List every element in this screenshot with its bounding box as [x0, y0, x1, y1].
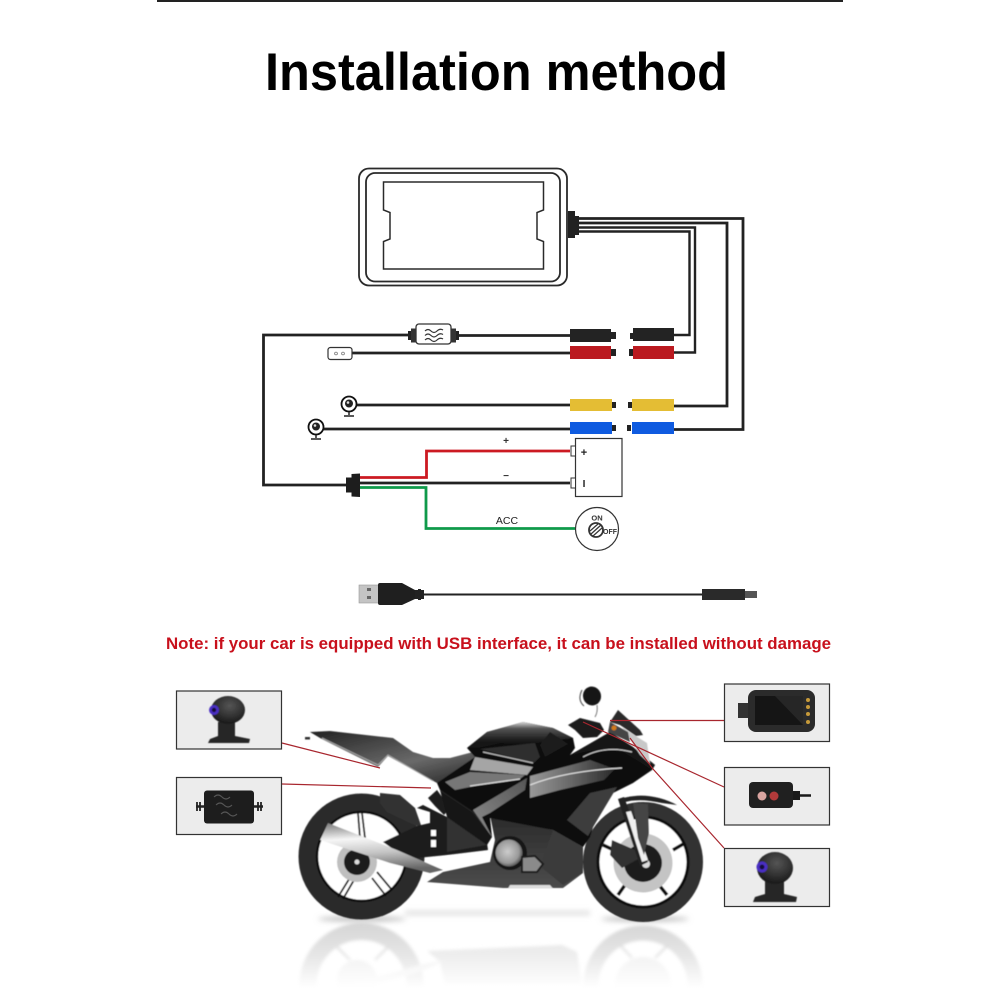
front camera icon and wire: [342, 396, 570, 416]
title: Installation method: [265, 43, 728, 102]
ACC green wire: ACC: [496, 515, 519, 527]
engine: [493, 836, 543, 872]
callout box: dash cam unit: [724, 684, 830, 742]
ignition switch: ON: [591, 514, 603, 522]
motorcycle: [305, 684, 696, 915]
ground shadow: [318, 911, 689, 921]
mirror: [580, 684, 604, 717]
exhaust pipe: [320, 823, 443, 873]
ACC green wire: [360, 488, 575, 528]
mid lower panel: [567, 787, 617, 836]
rear fender: [380, 793, 422, 828]
device outline: dash cam screen: [359, 168, 567, 286]
callout box: waterproof module: [176, 778, 282, 834]
ignition switch: OFF: [603, 529, 618, 536]
swingarm and frame: [383, 790, 492, 859]
blue connector pair: [570, 422, 674, 434]
power socket with wire: [328, 348, 570, 360]
rear camera icon and wire: [308, 420, 570, 439]
battery: [571, 438, 622, 496]
negative black wire: −: [503, 471, 509, 482]
windscreen: [608, 710, 650, 764]
wiring diagram: [264, 168, 743, 550]
note text: Note: if your car is equipped with USB interface, it can be installed without damage: [166, 635, 831, 653]
callout box: rear camera: [176, 691, 282, 749]
callout box: front camera: [724, 848, 830, 906]
front wheel: [590, 809, 696, 915]
battery: +: [581, 447, 587, 459]
power wire: left loop to fuse module: [264, 335, 570, 485]
wiring harness plug: [346, 474, 360, 497]
top rule: [157, 0, 843, 2]
positive red wire: [360, 436, 570, 478]
ignition switch: [576, 508, 618, 550]
front fork: [618, 797, 649, 866]
rear side panels: [445, 757, 533, 837]
front fender: [623, 796, 677, 805]
tail light: [305, 737, 310, 740]
rear wheel: [308, 802, 416, 910]
side fairing panel: [530, 760, 615, 798]
callout box: button module: [724, 768, 830, 825]
callout lines: [282, 720, 724, 848]
red connector pair: [570, 346, 674, 359]
battery: I: [583, 479, 586, 490]
main body black: [437, 722, 655, 847]
device cable strain relief: [568, 211, 579, 238]
lower belly fairing: [427, 815, 583, 888]
black connector pair: [570, 328, 674, 342]
handlebar: [568, 718, 604, 738]
USB cable: [359, 583, 757, 605]
inline module with wave icon: [408, 324, 459, 344]
upper front fairing: [572, 732, 655, 770]
yellow connector pair: [570, 399, 674, 411]
output wires to connectors: [578, 218, 743, 430]
seat and tail: [310, 731, 478, 783]
positive red wire: +: [503, 436, 509, 447]
frame cut-outs: [420, 815, 449, 869]
fuel tank highlight: [467, 722, 573, 748]
motorcycle reflection: [302, 922, 700, 978]
